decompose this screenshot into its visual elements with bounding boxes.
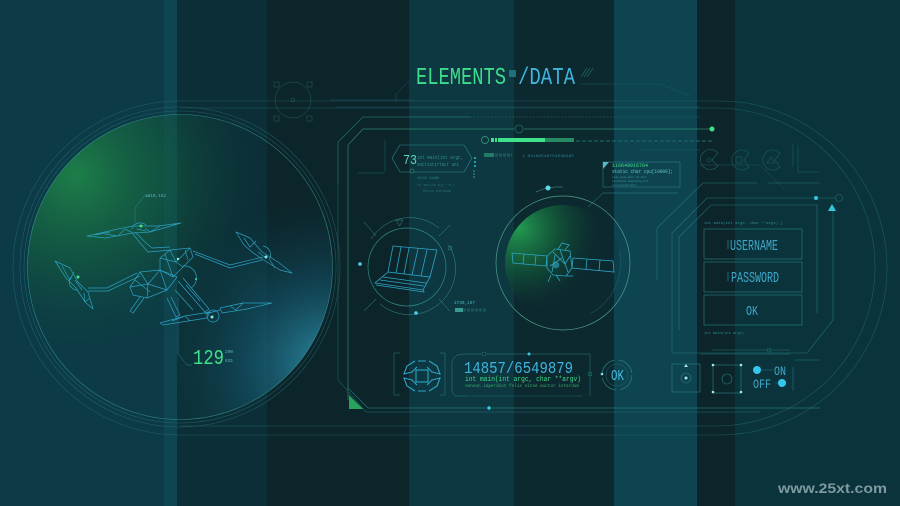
corner green triangle xyxy=(349,395,363,409)
laptop icon xyxy=(375,246,437,292)
panel: 73 readout: sectistirtacr unt xyxy=(417,162,459,168)
drone hub circles xyxy=(69,223,271,290)
ON OFF toggles xyxy=(753,360,820,392)
info callout: static char xyxy=(588,162,680,207)
login form: int main(int argc) xyxy=(704,331,744,336)
panel: 73 readout: 73 xyxy=(403,153,417,169)
status row: 1 84169548754548485 xyxy=(522,155,575,159)
laptop caption xyxy=(454,300,486,312)
title xyxy=(416,65,593,92)
title: ELEMENTS xyxy=(416,65,506,92)
drone reading 129 xyxy=(178,297,233,371)
ON OFF toggles: ON xyxy=(774,364,786,379)
icon row top right xyxy=(700,144,820,172)
drone top-view icon panel xyxy=(394,353,445,395)
OK field: OK xyxy=(746,304,758,320)
panel: 73 readout: 11111 11100 xyxy=(417,177,439,181)
propeller: top left xyxy=(87,223,181,238)
bottom frame dot xyxy=(487,406,491,410)
watermark: www.25xt.com xyxy=(777,480,887,496)
drone canopy xyxy=(130,270,177,298)
info callout: static char: sed do eiusmod tempor xyxy=(612,183,636,187)
info callout: static char: Lorem ipsum dolor sit amet xyxy=(612,175,646,179)
control icons xyxy=(672,364,742,393)
main frame lines xyxy=(330,81,820,412)
panel: 73 readout xyxy=(358,140,477,194)
propeller: right xyxy=(236,232,292,273)
ON OFF toggles: OFF xyxy=(753,377,771,392)
panel: 73 readout: int main(int arg) **ar-f xyxy=(417,183,455,188)
frame end dot xyxy=(710,126,714,132)
info callout: static char: 116649916704 xyxy=(612,163,648,169)
satellite dial xyxy=(496,186,630,330)
drone upper shell xyxy=(160,248,193,277)
OK round button xyxy=(601,360,632,390)
OK round button: OK xyxy=(611,368,624,385)
propeller: left xyxy=(55,261,93,309)
login frame xyxy=(657,183,842,354)
password field: PASSWORD xyxy=(731,270,779,287)
counter panel: Aenean imperdiet felis vitae auctor interdum xyxy=(465,383,579,389)
laptop dial xyxy=(358,218,456,315)
progress bar xyxy=(482,136,712,144)
drone reading 129: 129 xyxy=(193,348,224,371)
satellite icon xyxy=(512,243,614,282)
username field: USERNAME xyxy=(730,238,778,255)
drone markers xyxy=(76,224,268,318)
login form: int main(int argc, char **argv) { xyxy=(704,221,783,226)
counter panel: int main(int argc, char **argv) xyxy=(465,376,581,384)
info callout: static char: consectetur adipiscing elit xyxy=(612,179,648,183)
info callout: static char: static char cpu[10000]; xyxy=(612,169,673,175)
drone callout top: 1810,152 xyxy=(145,193,166,199)
frame dot and arrow xyxy=(814,196,836,211)
drone callout top xyxy=(135,193,166,222)
counter panel xyxy=(452,352,592,396)
drone arms xyxy=(88,232,263,291)
drone reading 129: 831 xyxy=(225,358,233,364)
status row xyxy=(484,153,575,159)
panel: 73 readout: int main(int argc, xyxy=(417,155,463,161)
drone landing struts xyxy=(130,278,209,317)
target icon top left xyxy=(274,82,312,121)
login form xyxy=(704,221,802,336)
panel: 73 readout: Hocon minimum xyxy=(423,189,451,194)
propeller: bottom xyxy=(160,303,272,325)
drone radar disc xyxy=(28,114,332,420)
counter panel: 14857/6549879 xyxy=(464,360,573,379)
drone wireframe xyxy=(55,223,292,325)
outer pill frame xyxy=(13,101,887,435)
laptop caption: 2730,197 xyxy=(454,300,475,306)
drone reading 129: 200 xyxy=(225,349,233,355)
title: /DATA xyxy=(518,65,575,92)
